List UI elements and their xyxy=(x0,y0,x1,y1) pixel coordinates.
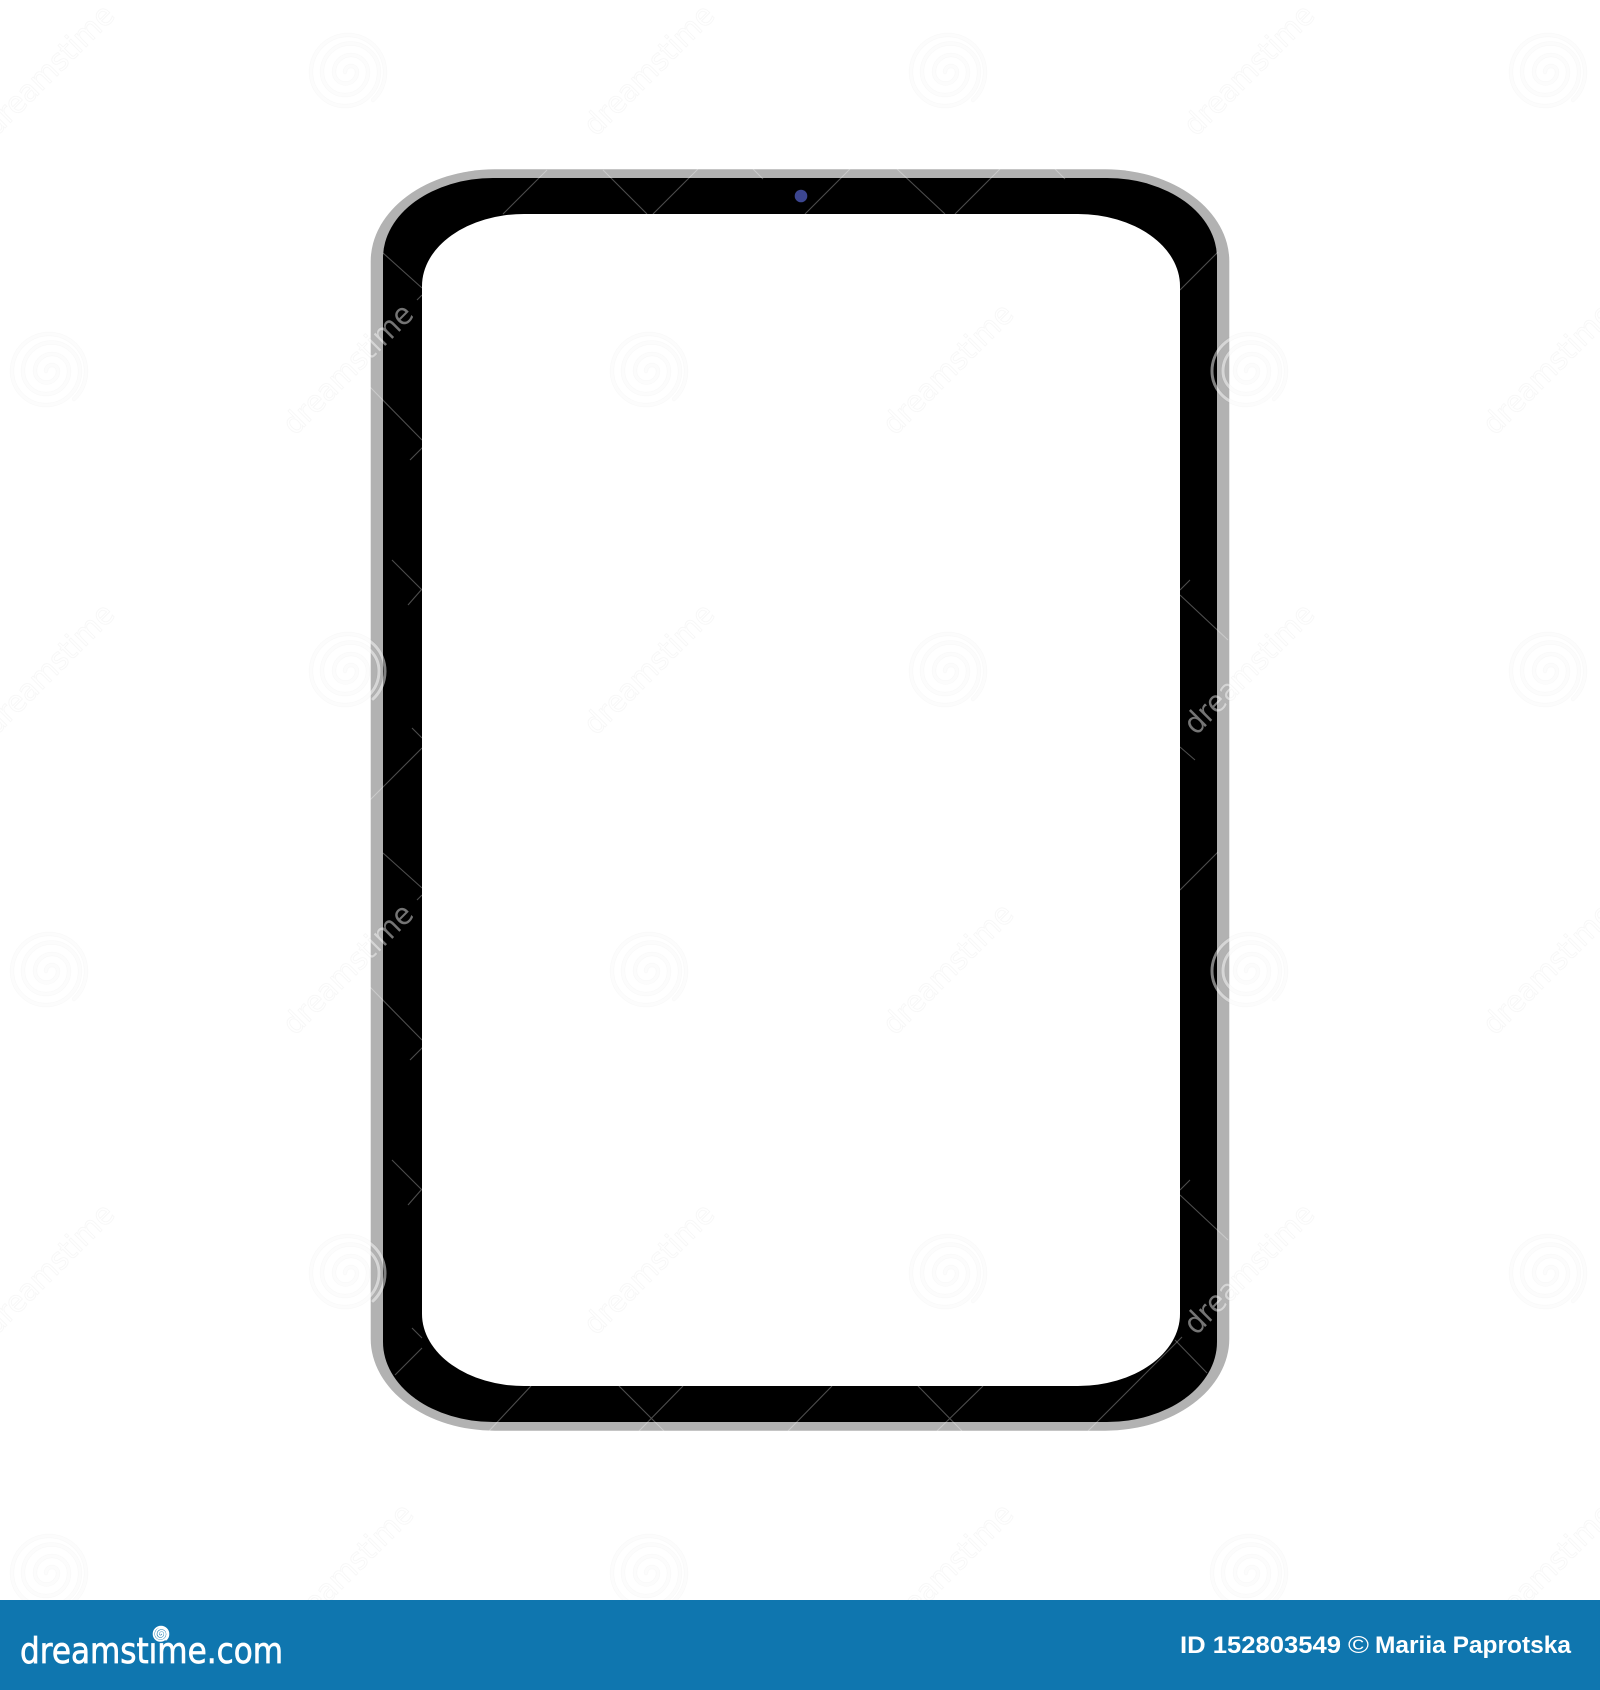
footer logo spiral xyxy=(150,1622,172,1642)
image id and credit xyxy=(1180,1632,1572,1659)
watermark text: dreamstime xyxy=(876,297,1021,442)
footer logo text: dreamstime.com xyxy=(20,1631,283,1672)
watermark text: dreamstime xyxy=(577,1197,722,1342)
tablet white screen xyxy=(422,214,1180,1386)
watermark text: dreamstime xyxy=(577,597,722,742)
tablet black bezel xyxy=(383,178,1217,1422)
image id and credit: Mariia Paprotska xyxy=(1375,1632,1572,1659)
tablet grey outer frame xyxy=(371,169,1229,1431)
image id and credit: © xyxy=(1348,1632,1369,1659)
watermark text: dreamstime xyxy=(876,1497,1021,1642)
footer bar xyxy=(0,1600,1600,1690)
front camera xyxy=(795,190,807,202)
watermark text: dreamstime xyxy=(1177,597,1322,742)
watermark text: dreamstime xyxy=(276,1497,421,1642)
image id and credit: ID 152803549 xyxy=(1180,1632,1341,1659)
watermark text: dreamstime xyxy=(1177,1197,1322,1342)
watermark text: dreamstime xyxy=(276,897,421,1042)
watermark text: dreamstime xyxy=(876,897,1021,1042)
tablet device xyxy=(371,169,1229,1431)
watermark text: dreamstime xyxy=(276,297,421,442)
